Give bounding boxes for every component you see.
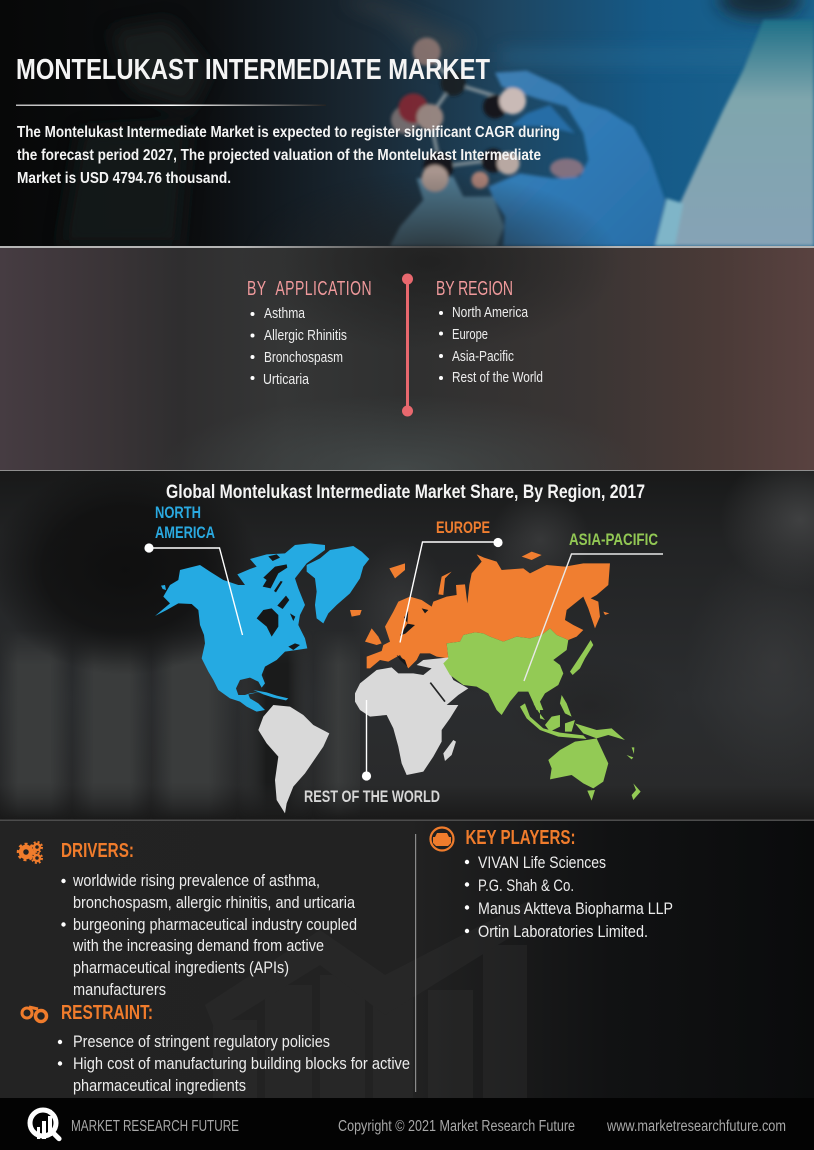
by application column: Allergic Rhinitis bbox=[264, 328, 347, 344]
by region column: BY REGION bbox=[436, 276, 513, 300]
driver list: pharmaceutical ingredients (APIs) bbox=[73, 959, 289, 977]
chart title: Global Montelukast Intermediate Market Share, By Region, 2017 bbox=[166, 482, 645, 503]
key players list: Ortin Laboratories Limited. bbox=[478, 923, 648, 941]
key players list: P.G. Shah & Co. bbox=[478, 877, 574, 895]
callout: North America: NORTH bbox=[155, 504, 201, 522]
driver list: manufacturers bbox=[73, 981, 166, 999]
key players list bbox=[465, 854, 673, 941]
title: MONTELUKAST INTERMEDIATE MARKET bbox=[16, 54, 490, 86]
gloved hand bbox=[488, 71, 665, 246]
by application column bbox=[247, 276, 372, 388]
world map bbox=[155, 543, 641, 813]
key players list: Manus Aktteva Biopharma LLP bbox=[478, 900, 673, 918]
icon: key players badge bbox=[430, 828, 454, 850]
footer bbox=[0, 1098, 814, 1150]
by region column: Europe bbox=[452, 327, 488, 343]
Red Sea bbox=[430, 683, 445, 702]
region: Rest of the World bbox=[258, 657, 468, 813]
hero photo: lab hand with molecule bbox=[60, 0, 814, 246]
callout: North America: AMERICA bbox=[155, 524, 215, 542]
key players list: VIVAN Life Sciences bbox=[478, 854, 606, 872]
icon: gears bbox=[18, 842, 42, 863]
callout: Europe bbox=[400, 519, 503, 642]
glove fingers lower left bbox=[390, 177, 504, 246]
callout: North America bbox=[144, 504, 242, 635]
driver list: with the increasing demand from active bbox=[72, 937, 324, 955]
region: North America bbox=[155, 543, 369, 712]
intro paragraph: the forecast period 2027, The projected valuation of the Montelukast Intermediate bbox=[17, 147, 541, 164]
lab coat sleeve bbox=[673, 18, 814, 246]
molecule bbox=[391, 38, 583, 178]
inlets bbox=[257, 554, 300, 650]
driver list: burgeoning pharmaceutical industry coupled bbox=[73, 916, 357, 934]
by application column: Asthma bbox=[264, 306, 306, 322]
brand name: MARKET RESEARCH FUTURE bbox=[71, 1118, 239, 1135]
region: Asia-Pacific bbox=[443, 628, 641, 801]
region: Europe and Russia bbox=[350, 552, 610, 668]
heading: drivers: DRIVERS: bbox=[61, 840, 134, 862]
heading: restraint: RESTRAINT: bbox=[61, 1002, 153, 1024]
by region column bbox=[436, 276, 543, 386]
icon: handcuffs bbox=[22, 1007, 46, 1022]
inlets bbox=[397, 608, 428, 667]
panel: segmentation bbox=[0, 172, 814, 545]
restraint list: High cost of manufacturing building blocks for active bbox=[73, 1055, 410, 1073]
by region column: Asia-Pacific bbox=[452, 349, 514, 365]
callout: Rest of the World: REST OF THE WORLD bbox=[304, 788, 440, 806]
restraint list: pharmaceutical ingredients bbox=[73, 1077, 246, 1095]
intro paragraph: Market is USD 4794.76 thousand. bbox=[17, 170, 231, 187]
driver list: worldwide rising prevalence of asthma, bbox=[72, 872, 320, 890]
panel: hero header bbox=[0, 0, 814, 246]
driver list bbox=[61, 872, 357, 999]
restraint block bbox=[22, 1002, 410, 1095]
by application column: Urticaria bbox=[263, 372, 310, 388]
panel: drivers, restraint and key players bbox=[0, 821, 672, 1098]
intro paragraph: The Montelukast Intermediate Market is expected to register significant CAGR during bbox=[17, 124, 560, 141]
by application column: Bronchospasm bbox=[264, 350, 343, 366]
divider with end dots bbox=[402, 274, 413, 416]
drivers block bbox=[18, 840, 357, 999]
callout: Rest of the World bbox=[304, 700, 440, 806]
restraint list: Presence of stringent regulatory policies bbox=[73, 1033, 330, 1051]
icon: logo bbox=[30, 1109, 63, 1142]
panel: world map section bbox=[0, 450, 814, 820]
callout: Asia-Pacific: ASIA-PACIFIC bbox=[569, 531, 658, 549]
by region column: Rest of the World bbox=[452, 370, 543, 386]
key players block bbox=[430, 827, 673, 941]
driver list: bronchospasm, allergic rhinitis, and urticaria bbox=[73, 894, 356, 912]
by region column: North America bbox=[452, 305, 529, 321]
restraint list bbox=[58, 1033, 410, 1095]
callout: Europe: EUROPE bbox=[436, 519, 490, 537]
by application column: BY APPLICATION bbox=[247, 276, 372, 300]
heading: key players: KEY PLAYERS: bbox=[466, 827, 576, 849]
callout: Asia-Pacific bbox=[524, 531, 663, 681]
copyright: Copyright © 2021 Market Research Future bbox=[338, 1118, 575, 1135]
intro paragraph bbox=[17, 124, 560, 187]
